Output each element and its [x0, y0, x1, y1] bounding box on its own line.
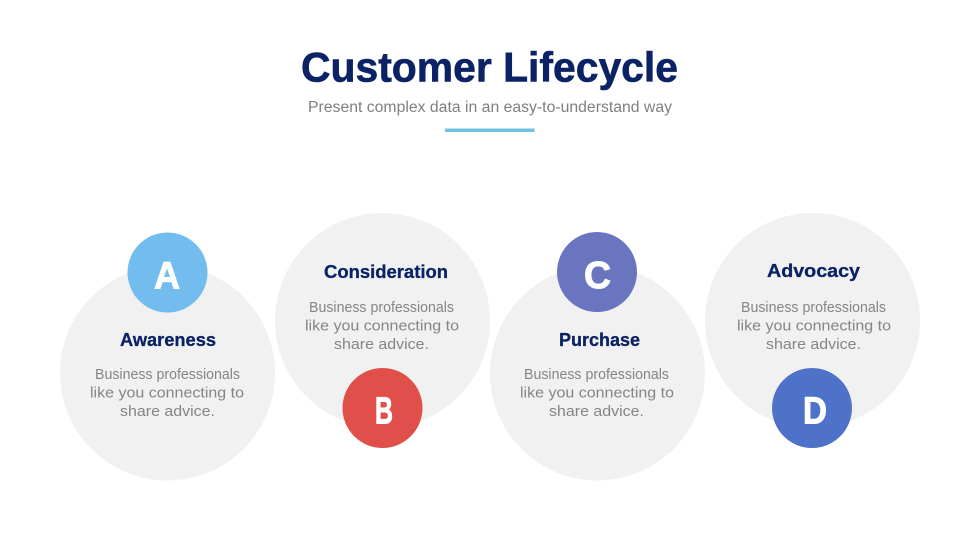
text: consideration description	[305, 300, 459, 353]
text: consideration description: Business professionals	[309, 300, 454, 316]
panel: consideration	[275, 213, 490, 448]
panel: advocacy	[705, 213, 920, 448]
icon: badge A: A	[154, 256, 180, 298]
text: consideration description: like you connecting to	[305, 318, 459, 334]
text: purchase description	[520, 367, 674, 420]
heading: purchase: Purchase	[559, 329, 640, 350]
text: advocacy description: like you connecting to	[737, 318, 891, 334]
text: awareness description: Business professionals	[95, 367, 240, 383]
icon: badge C	[557, 232, 637, 312]
icon: badge A	[128, 232, 208, 312]
subtitle: Present complex data in an easy-to-understand way	[308, 99, 672, 116]
icon: badge B: B	[375, 390, 393, 432]
text: purchase description: like you connecting to	[520, 386, 674, 402]
title underline accent	[445, 128, 534, 132]
panel: purchase	[490, 232, 705, 480]
title: Customer Lifecycle	[301, 44, 678, 90]
text: advocacy description: Business professionals	[741, 300, 886, 316]
icon: badge C: C	[584, 255, 611, 297]
heading: consideration: Consideration	[324, 261, 448, 282]
text: awareness description: share advice.	[120, 404, 215, 420]
heading: advocacy: Advocacy	[767, 260, 861, 281]
panel: awareness	[60, 232, 275, 480]
text: awareness description	[90, 367, 244, 420]
text: advocacy description	[737, 300, 891, 353]
heading: awareness: Awareness	[120, 329, 216, 350]
text: purchase description: share advice.	[549, 404, 644, 420]
icon: badge D: D	[803, 390, 827, 432]
text: advocacy description: share advice.	[766, 337, 861, 353]
icon: badge B	[342, 368, 422, 448]
text: consideration description: share advice.	[334, 337, 429, 353]
icon: badge D	[772, 368, 852, 448]
text: awareness description: like you connecting to	[90, 386, 244, 402]
text: purchase description: Business professionals	[524, 367, 669, 383]
